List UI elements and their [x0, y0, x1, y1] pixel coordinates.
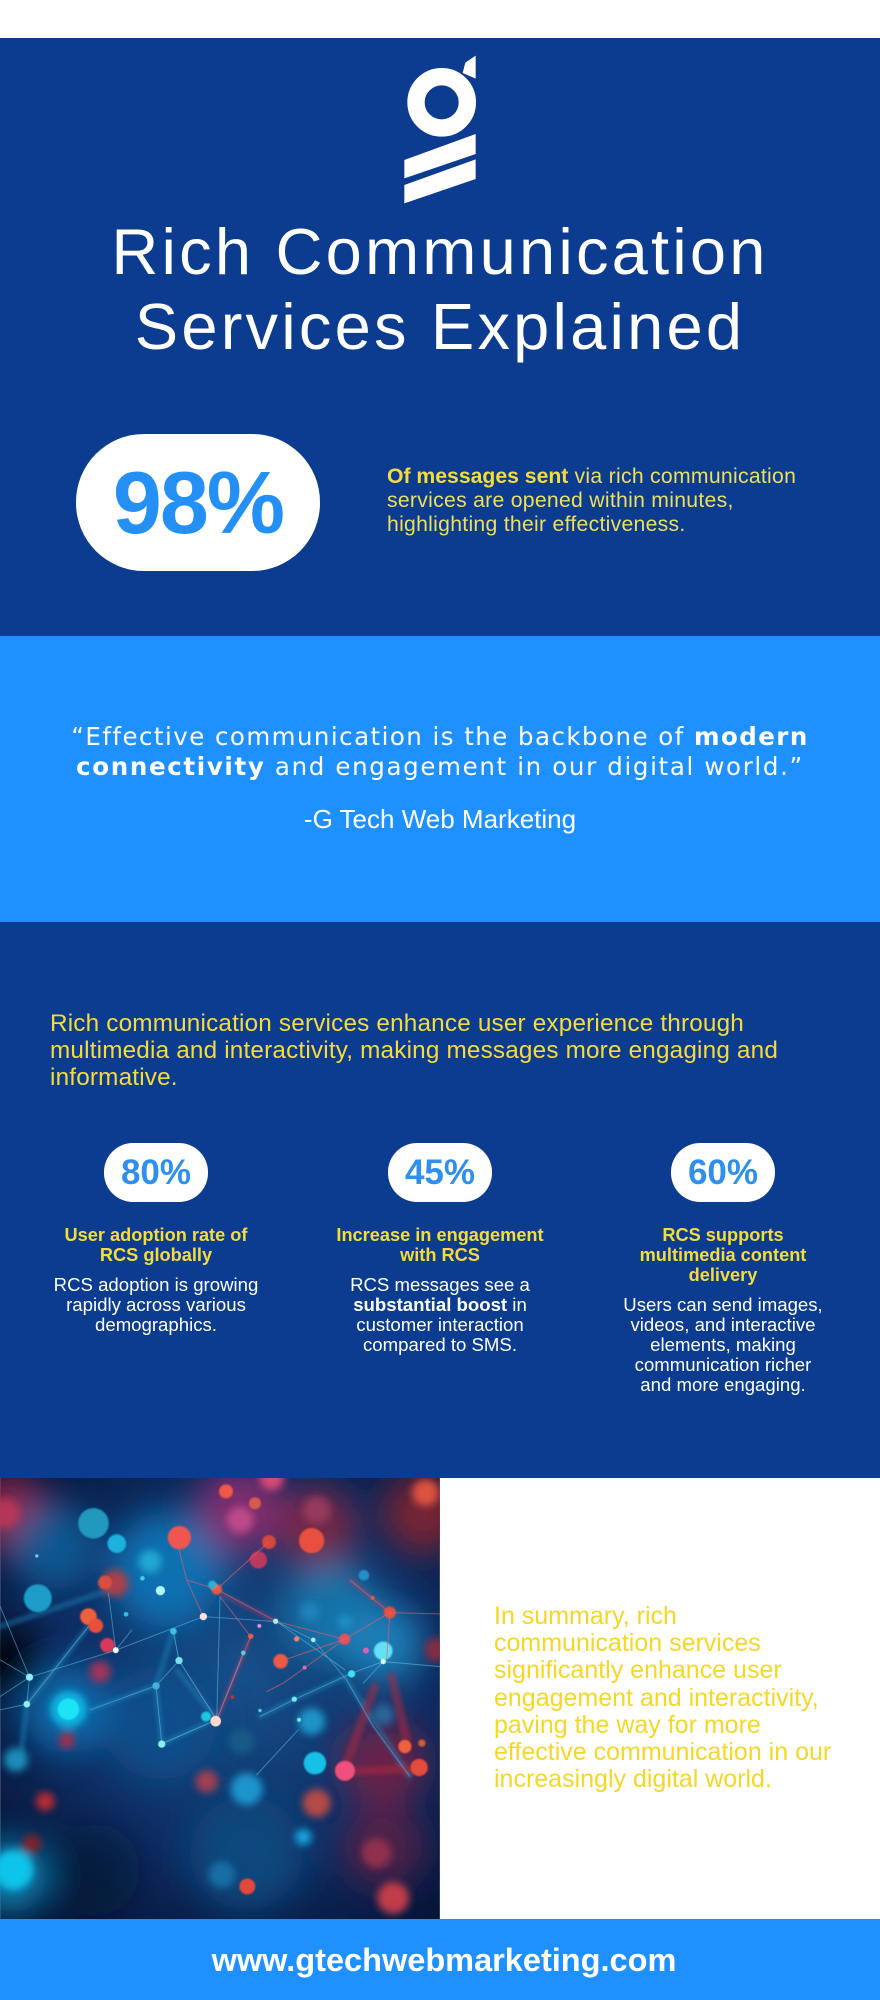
summary text: increasingly digital world. [494, 1765, 772, 1793]
pill: 60% [671, 1143, 775, 1202]
card text [54, 1274, 258, 1335]
card: 80% [54, 1143, 258, 1335]
summary text: paving the way for more [494, 1711, 761, 1739]
intro paragraph: multimedia and interactivity, making messages more engaging and [50, 1037, 778, 1064]
quote: connectivity and engagement in our digital world.” [76, 752, 804, 781]
network lines [0, 1540, 440, 1776]
quote band [0, 636, 880, 922]
footer band [0, 1919, 880, 2000]
summary text: In summary, rich [494, 1602, 677, 1630]
card: 60% [623, 1143, 823, 1395]
summary text: significantly enhance user [494, 1656, 782, 1684]
stat pill: 98% [76, 434, 320, 571]
card heading: Increase in engagement [336, 1225, 544, 1245]
pill: 80% [104, 1143, 208, 1202]
stats band [0, 922, 880, 1478]
card text: elements, making [650, 1334, 796, 1355]
card text: customer interaction [356, 1314, 524, 1335]
pill: 60%: 60% [688, 1152, 758, 1192]
card text: substantial boost in [353, 1294, 527, 1315]
card heading: with RCS [400, 1245, 480, 1265]
quote: “Effective communication is the backbone of modern [71, 722, 809, 751]
stat description: highlighting their effectiveness. [387, 513, 686, 536]
intro paragraph: informative. [50, 1064, 178, 1091]
summary text: communication services [494, 1629, 761, 1657]
intro paragraph: Rich communication services enhance user experience through [50, 1010, 744, 1037]
card: 45% [336, 1143, 544, 1355]
card heading: RCS globally [100, 1245, 212, 1265]
stat description: services are opened within minutes, [387, 489, 734, 512]
pill: 80%: 80% [121, 1152, 191, 1192]
card heading: RCS supports [662, 1225, 784, 1245]
pill: 45%: 45% [405, 1152, 475, 1192]
card text: Users can send images, [623, 1294, 823, 1315]
summary text: effective communication in our [494, 1738, 831, 1766]
card text: and more engaging. [640, 1374, 806, 1395]
network photo [0, 1478, 440, 1919]
card text [350, 1274, 530, 1355]
card text: videos, and interactive [630, 1314, 816, 1335]
card heading: User adoption rate of [65, 1225, 247, 1245]
card text: RCS adoption is growing [54, 1274, 258, 1295]
card text [623, 1294, 823, 1395]
summary text: engagement and interactivity, [494, 1684, 819, 1712]
quote [71, 722, 809, 781]
card text: compared to SMS. [363, 1334, 517, 1355]
quote attribution: -G Tech Web Marketing [304, 804, 576, 834]
card heading [336, 1225, 544, 1265]
title [111, 215, 769, 363]
stat description [387, 465, 796, 536]
title: Rich Communication [111, 215, 769, 288]
intro paragraph [50, 1010, 778, 1091]
summary text [494, 1602, 831, 1793]
pill: 45% [388, 1143, 492, 1202]
card text: demographics. [95, 1314, 217, 1335]
card heading: multimedia content [640, 1245, 806, 1265]
icon: G Tech logo [404, 56, 476, 204]
stat description: Of messages sent via rich communication [387, 465, 796, 488]
header band [0, 38, 880, 636]
title: Services Explained [135, 290, 745, 363]
card heading [640, 1225, 806, 1285]
stat pill: 98%: 98% [113, 452, 283, 552]
card text: communication richer [635, 1354, 811, 1375]
card text: RCS messages see a [350, 1274, 530, 1295]
website url: www.gtechwebmarketing.com [212, 1942, 676, 1978]
card heading [65, 1225, 248, 1265]
card text: rapidly across various [66, 1294, 246, 1315]
card heading: delivery [689, 1265, 757, 1285]
